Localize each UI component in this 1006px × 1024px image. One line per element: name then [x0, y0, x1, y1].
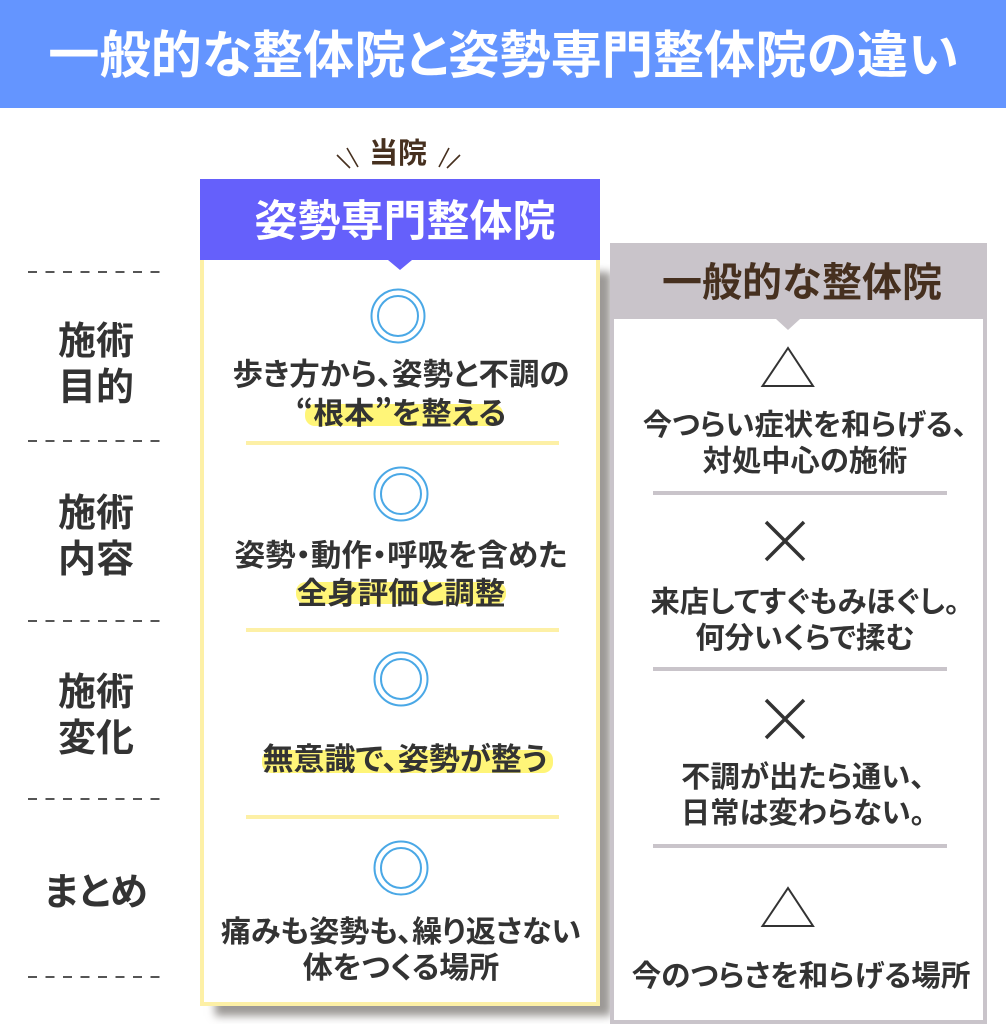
text: 姿勢・動作・呼吸 — [235, 531, 567, 613]
label: 施術目的: 目的 — [58, 356, 134, 411]
text: 姿勢・動作・呼吸: 姿勢・動作・呼吸を含めた — [235, 531, 567, 575]
general row 2 — [650, 520, 960, 657]
header text: 一般的な整体院 — [662, 250, 942, 308]
text: 今つらい: 今つらい症状を和らげる、 — [643, 402, 967, 444]
label: 施術変化: 変化 — [58, 707, 134, 762]
header text: 姿勢専門整体院 — [254, 187, 556, 249]
label: 施術内容: 内容 — [58, 528, 134, 583]
general row 4 — [632, 886, 970, 995]
text: 来店して: 来店してすぐもみほぐし。 — [650, 579, 960, 621]
header: 姿勢専門整体院 — [200, 179, 600, 260]
header pointer — [388, 260, 412, 270]
text: 歩き方から: “根本”を整える — [296, 389, 506, 433]
panel: posture seitai — [200, 179, 600, 1006]
icon: double circle — [374, 466, 428, 522]
posture row 4 — [221, 840, 581, 987]
text: 今のつらさ: 今のつらさを和らげる場所 — [632, 952, 970, 995]
text: 来店して — [650, 579, 960, 657]
posture row 1 — [232, 288, 570, 433]
icon: double circle — [370, 288, 426, 344]
label: まとめ: まとめ — [44, 861, 148, 916]
panel shadow — [204, 262, 600, 1006]
icon: cross — [764, 698, 806, 740]
highlight — [262, 750, 553, 773]
text: 歩き方から: 歩き方から、姿勢と不調の — [232, 350, 570, 394]
text: 姿勢・動作・呼吸: 全身評価と調整 — [297, 569, 505, 613]
badge: 当院 — [336, 130, 460, 172]
panel: general seitai — [610, 243, 987, 1024]
icon: spark lines — [336, 148, 460, 169]
icon: triangle — [760, 886, 815, 927]
highlight — [296, 582, 506, 604]
text: 痛みも姿勢も: 体をつくる場所 — [303, 943, 499, 987]
header pointer — [776, 319, 800, 330]
highlight — [305, 404, 503, 426]
text: 今つらい — [643, 402, 967, 480]
icon: double circle — [374, 840, 428, 896]
label: 施術目的: 施術 — [58, 310, 134, 365]
title: 一般的な整体院と姿勢専門整体院の違い — [48, 14, 959, 88]
general row 1 — [643, 346, 967, 480]
posture row 2 — [235, 466, 567, 613]
text: 不調が出たら — [681, 754, 925, 832]
badge text: 当院 — [369, 130, 427, 172]
text: 痛みも姿勢も — [221, 907, 581, 987]
general row 3 — [681, 698, 925, 832]
label: 施術内容 — [58, 482, 134, 583]
row label column — [28, 271, 160, 978]
icon: double circle — [374, 652, 428, 706]
text: 痛みも姿勢も: 痛みも姿勢も、繰り返さない — [221, 907, 581, 951]
posture row 3 — [262, 652, 553, 779]
icon: triangle — [760, 346, 815, 387]
header: 一般的な整体院 — [610, 243, 987, 319]
text: 来店して: 何分いくらで揉む — [695, 615, 915, 657]
text: 不調が出たら: 日常は変わらない。 — [681, 790, 925, 832]
text: 無意識で: 無意識で、姿勢が整う — [262, 734, 548, 779]
icon: cross — [764, 520, 806, 562]
label: 施術内容: 施術 — [58, 482, 134, 537]
label: 施術変化 — [58, 661, 134, 762]
text: 歩き方から — [232, 350, 570, 433]
text: 不調が出たら: 不調が出たら通い、 — [681, 754, 925, 796]
text: 今つらい: 対処中心の施術 — [703, 438, 907, 480]
label: 施術変化: 施術 — [58, 661, 134, 716]
label: 施術目的 — [58, 310, 134, 411]
title banner — [0, 0, 1006, 108]
